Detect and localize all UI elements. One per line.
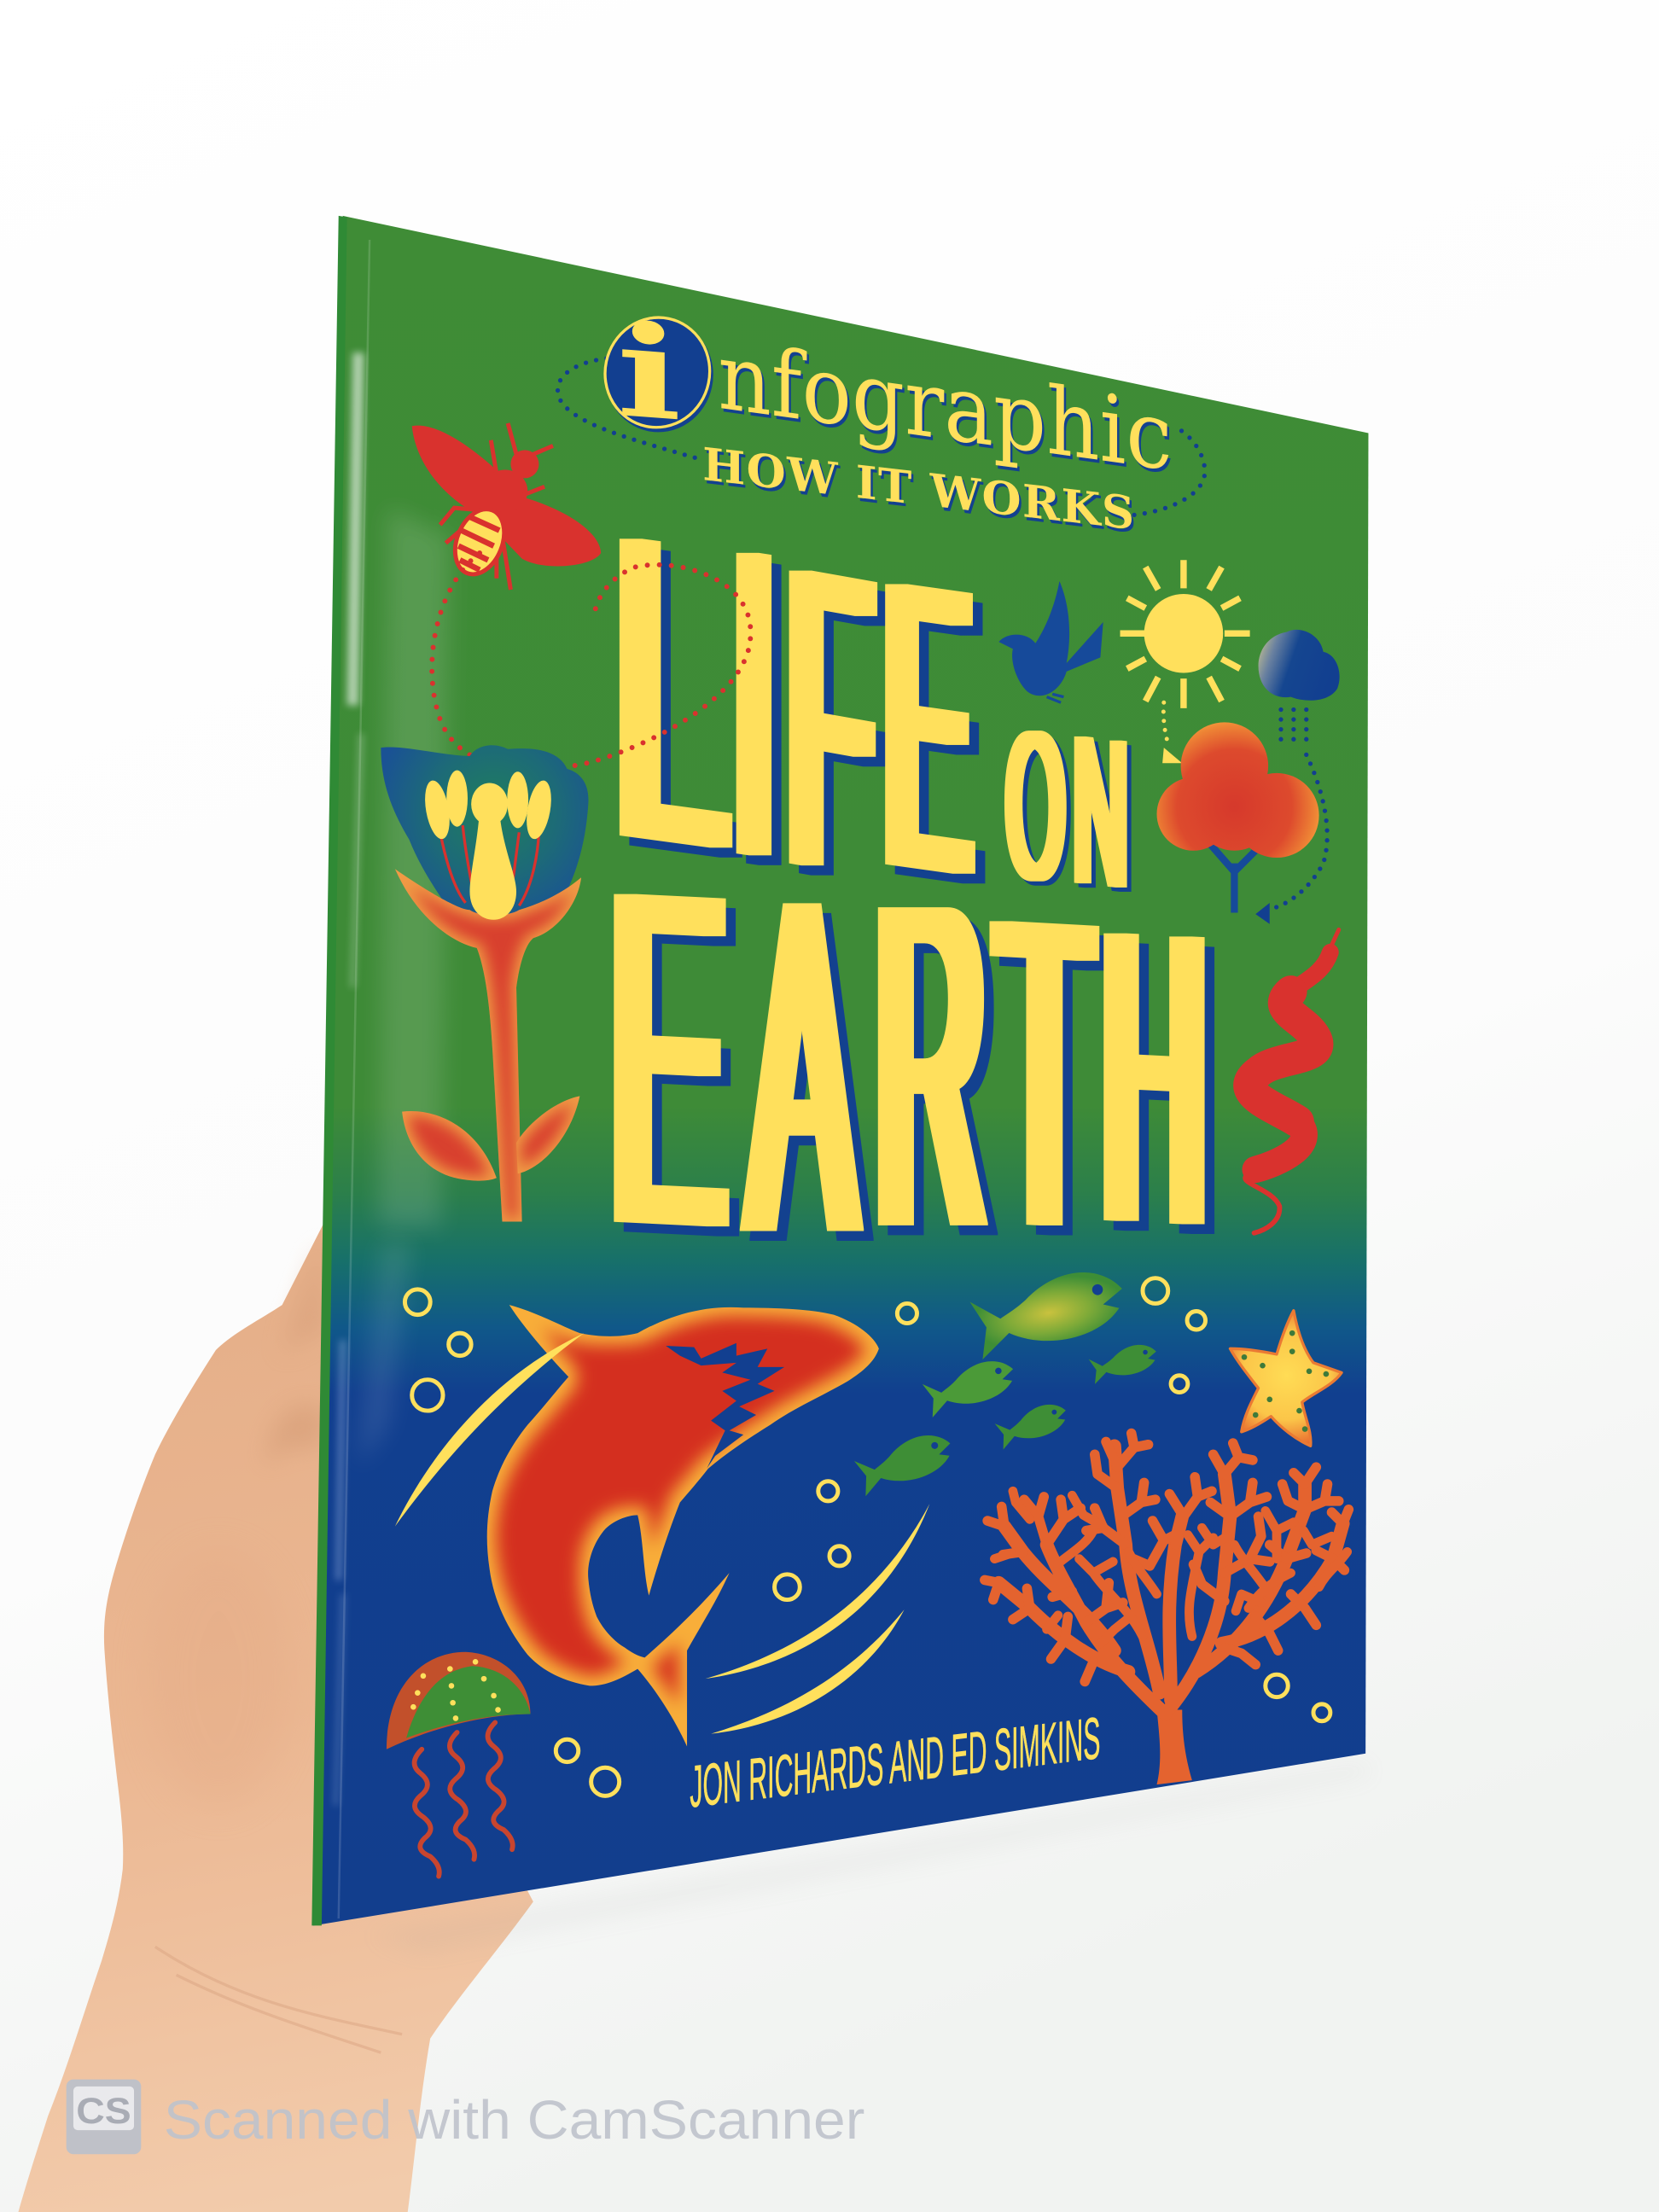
title: LIFE: E bbox=[886, 497, 969, 960]
series subtitle: HOW IT WORKS bbox=[702, 437, 1134, 540]
book cover bbox=[311, 216, 1368, 1925]
title: EARTH: A bbox=[750, 802, 853, 1331]
bubbles bbox=[405, 1278, 1330, 1796]
book page edge strip bbox=[311, 216, 347, 1925]
title: EARTH bbox=[611, 791, 1205, 1331]
hand holding the book bbox=[18, 1225, 533, 2212]
book drop shadow bbox=[370, 1763, 1371, 1953]
title: LIFE bbox=[614, 445, 969, 966]
icon: cloud bbox=[1259, 630, 1340, 701]
shark teeth bbox=[666, 1343, 784, 1469]
title: LIFE: L bbox=[614, 445, 728, 939]
title: EARTH: H bbox=[1103, 843, 1205, 1312]
speed swooshes bbox=[395, 1333, 929, 1734]
icon: bird bbox=[998, 581, 1103, 702]
bee flight dotted path bbox=[432, 553, 751, 770]
authors: JON RICHARDS AND ED SIMKINS bbox=[690, 1705, 1100, 1819]
watermark bbox=[67, 2080, 864, 2154]
flower sepals and stem bbox=[395, 869, 581, 1222]
title: ON: O bbox=[1006, 686, 1064, 927]
title: EARTH: E bbox=[611, 791, 725, 1327]
watermark logo: CS bbox=[76, 2091, 131, 2132]
icon: flower bbox=[381, 745, 589, 1222]
filaments bbox=[440, 825, 538, 905]
icon: starfish bbox=[1230, 1311, 1342, 1446]
icon: tree bbox=[1157, 722, 1319, 913]
flower petals bbox=[381, 745, 589, 948]
stamens and pistil bbox=[421, 771, 556, 920]
icon: jellyfish bbox=[387, 1652, 531, 1877]
watermark text: Scanned with CamScanner bbox=[164, 2090, 864, 2151]
spine glare and creases bbox=[335, 240, 449, 1918]
icon: shark bbox=[487, 1305, 879, 1746]
icon: coral bbox=[985, 1434, 1348, 1784]
icon: sun bbox=[1121, 560, 1250, 708]
watermark logo bbox=[67, 2080, 141, 2154]
icon: bee bbox=[412, 423, 601, 590]
rain dotted arrow bbox=[1255, 709, 1327, 924]
dotted ellipse bbox=[558, 358, 1205, 515]
fish school bbox=[853, 1266, 1160, 1497]
title: LIFE: F bbox=[789, 478, 871, 966]
icon: i badge bbox=[595, 296, 720, 450]
title: EARTH: T bbox=[997, 829, 1091, 1320]
sun to tree dotted arrow bbox=[1162, 702, 1182, 763]
flower leaves bbox=[402, 1096, 579, 1181]
title: LIFE: I bbox=[734, 458, 773, 950]
bee abdomen bbox=[446, 502, 513, 581]
title: ON bbox=[1006, 686, 1127, 934]
title: ON: N bbox=[1074, 692, 1127, 934]
title: EARTH: R bbox=[877, 809, 984, 1322]
series logo and dotted ellipse bbox=[558, 296, 1205, 540]
icon: i badge: i bbox=[616, 296, 682, 450]
wordmark: nfographic bbox=[718, 321, 1173, 492]
icon: snake bbox=[1245, 929, 1339, 1233]
